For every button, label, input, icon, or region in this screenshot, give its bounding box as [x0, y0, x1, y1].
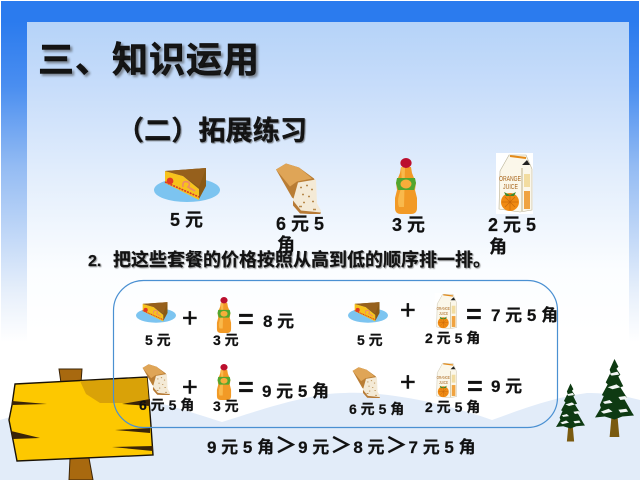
combo: cake plus bottle: + — [182, 303, 198, 333]
combo: bread plus carton: 2 元 5 角 — [425, 399, 480, 415]
combo: bread plus bottle: + — [182, 372, 198, 402]
question text: 把这些套餐的价格按照从高到低的顺序排一排。 — [113, 249, 491, 270]
combo: bread plus bottle: 9 元 5 角 — [262, 381, 329, 401]
icon: wooden signpost — [9, 369, 153, 480]
price: bottle: 3 元 — [392, 215, 425, 235]
price: bread: 6 元 5 — [276, 214, 324, 234]
subtitle: （二）拓展练习 — [117, 116, 307, 146]
price: cake: 5 元 — [170, 210, 203, 230]
price: carton: 角 — [489, 237, 507, 257]
combo: cake plus carton — [348, 293, 558, 348]
combo: cake plus bottle: 5 元 — [145, 332, 171, 348]
panel: meal combinations — [114, 280, 558, 428]
combo: cake plus carton: 5 元 — [357, 332, 383, 348]
title: 三、知识运用 — [38, 39, 259, 80]
price: carton: 2 元 5 — [488, 215, 536, 235]
icon: bread — [276, 164, 321, 214]
combo: cake plus bottle — [136, 297, 294, 348]
icon: small pine tree — [556, 384, 585, 442]
combo: cake plus carton: + — [400, 295, 416, 325]
combo: cake plus carton: = — [466, 299, 482, 329]
combo: cake plus bottle: = — [238, 304, 254, 334]
combo: bread plus bottle: 6 元 5 角 — [139, 397, 194, 413]
icon: juice bottle — [395, 158, 417, 214]
price: bread: 角 — [277, 235, 295, 255]
panel outline — [114, 280, 558, 428]
question text: 2. — [88, 253, 101, 270]
combo: cake plus carton: 2 元 5 角 — [425, 330, 480, 346]
combo: bread plus carton: + — [400, 367, 416, 397]
combo: bread plus carton: = — [467, 371, 483, 401]
icon: cake — [154, 168, 220, 202]
combo: cake plus carton: 7 元 5 角 — [491, 305, 558, 325]
combo: bread plus bottle: 3 元 — [213, 398, 239, 414]
combo: bread plus carton: 6 元 5 角 — [349, 401, 404, 417]
icon: large pine tree — [595, 359, 634, 437]
combo: cake plus bottle: 3 元 — [213, 332, 239, 348]
combo: bread plus carton — [349, 362, 522, 417]
icon: orange juice carton — [496, 153, 533, 214]
combo: bread plus bottle — [139, 364, 329, 414]
ordering result: 9 元 5 角＞9 元＞8 元＞7 元 5 角 — [207, 433, 476, 458]
combo: bread plus carton: 9 元 — [491, 377, 522, 396]
combo: cake plus bottle: 8 元 — [263, 312, 294, 331]
combo: bread plus bottle: = — [238, 372, 254, 402]
